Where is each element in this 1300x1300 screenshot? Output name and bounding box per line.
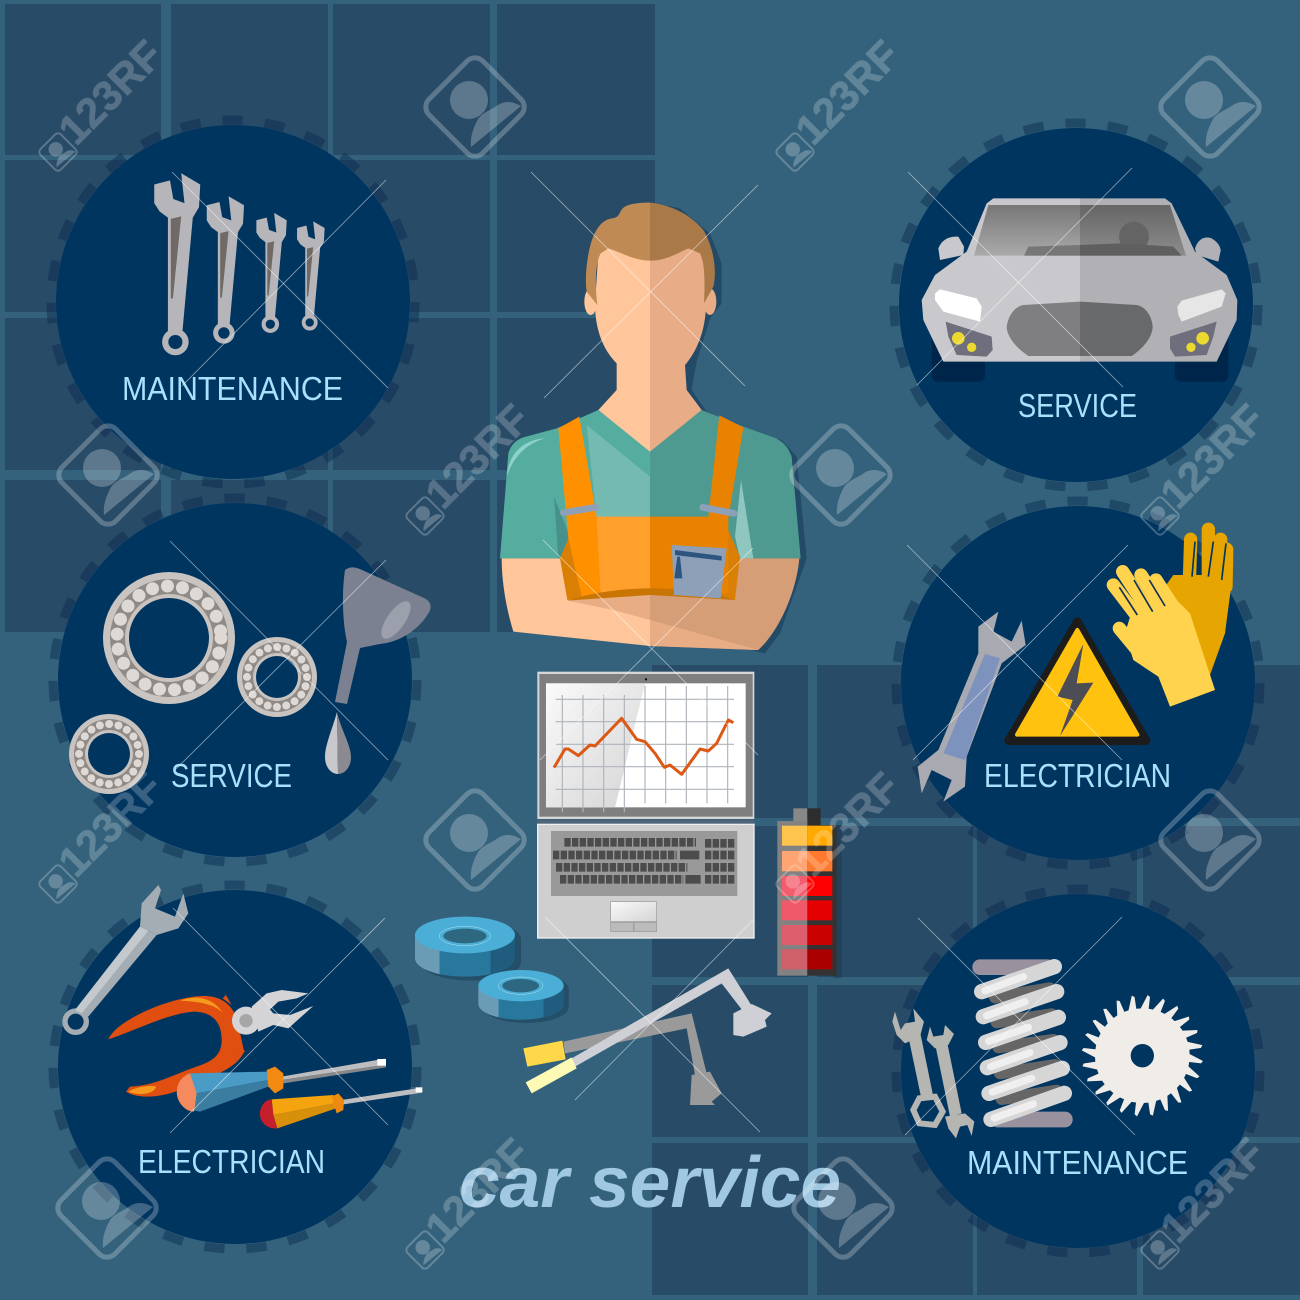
- screen lid: [537, 672, 754, 819]
- label: maintenance: MAINTENANCE: [967, 1144, 1188, 1181]
- icon: pliers: [108, 990, 313, 1097]
- watermark text: 123RF: [1151, 395, 1274, 517]
- label: service: SERVICE: [171, 757, 292, 794]
- keyboard base: [537, 820, 754, 938]
- icon: small wrenches: [892, 1008, 974, 1138]
- watermark text: 123RF: [49, 31, 172, 153]
- panel: electrician safety: [896, 501, 1260, 865]
- line chart: [554, 686, 734, 812]
- battery indicator: [777, 808, 842, 978]
- watermark text: 123RF: [416, 1129, 539, 1251]
- icon: oil funnel: [335, 567, 431, 704]
- icon: oil drop: [325, 712, 351, 774]
- icon: four wrenches: [154, 173, 325, 352]
- icon: coil spring: [972, 959, 1073, 1127]
- watermark text: 123RF: [49, 763, 172, 885]
- icon: orange screwdriver: [260, 1087, 422, 1128]
- tile grid bottom right: [652, 665, 1300, 1295]
- icon: medium bearing: [237, 637, 317, 717]
- icon: car front: [922, 198, 1237, 382]
- label: maintenance: MAINTENANCE: [122, 370, 343, 407]
- label: service: SERVICE: [1018, 387, 1137, 424]
- icon: saw blade: [1082, 995, 1203, 1116]
- panel: electrician tools: [53, 885, 422, 1249]
- title: car service: car service: [459, 1143, 841, 1223]
- icon: small bearing: [69, 714, 149, 794]
- tile grid top left: [5, 4, 655, 632]
- cables with plugs: [523, 968, 772, 1105]
- icon: warning triangle: [1009, 622, 1146, 741]
- panel: service bearings: [53, 498, 431, 862]
- label: electrician: ELECTRICIAN: [138, 1143, 325, 1180]
- panel: service car: [894, 123, 1258, 487]
- label: electrician: ELECTRICIAN: [984, 757, 1171, 794]
- watermark text: 123RF: [1151, 1129, 1274, 1251]
- icon: spanner: [918, 612, 1026, 802]
- laptop with chart: [537, 672, 754, 938]
- insulating tape rolls: [415, 917, 569, 1023]
- watermark text: 123RF: [786, 763, 909, 885]
- icon: spanner: [65, 885, 188, 1032]
- icon: blue screwdriver: [177, 1059, 386, 1112]
- mechanic figure: [500, 203, 807, 653]
- icon: large bearing: [103, 572, 235, 704]
- panel: maintenance spring and saw: [892, 889, 1260, 1253]
- watermark text: 123RF: [786, 31, 909, 153]
- watermark crosshair lines: [170, 168, 1135, 1135]
- watermark text: 123RF: [416, 395, 539, 517]
- icon: gloves: [1113, 529, 1233, 707]
- panel: maintenance wrenches: [51, 120, 415, 484]
